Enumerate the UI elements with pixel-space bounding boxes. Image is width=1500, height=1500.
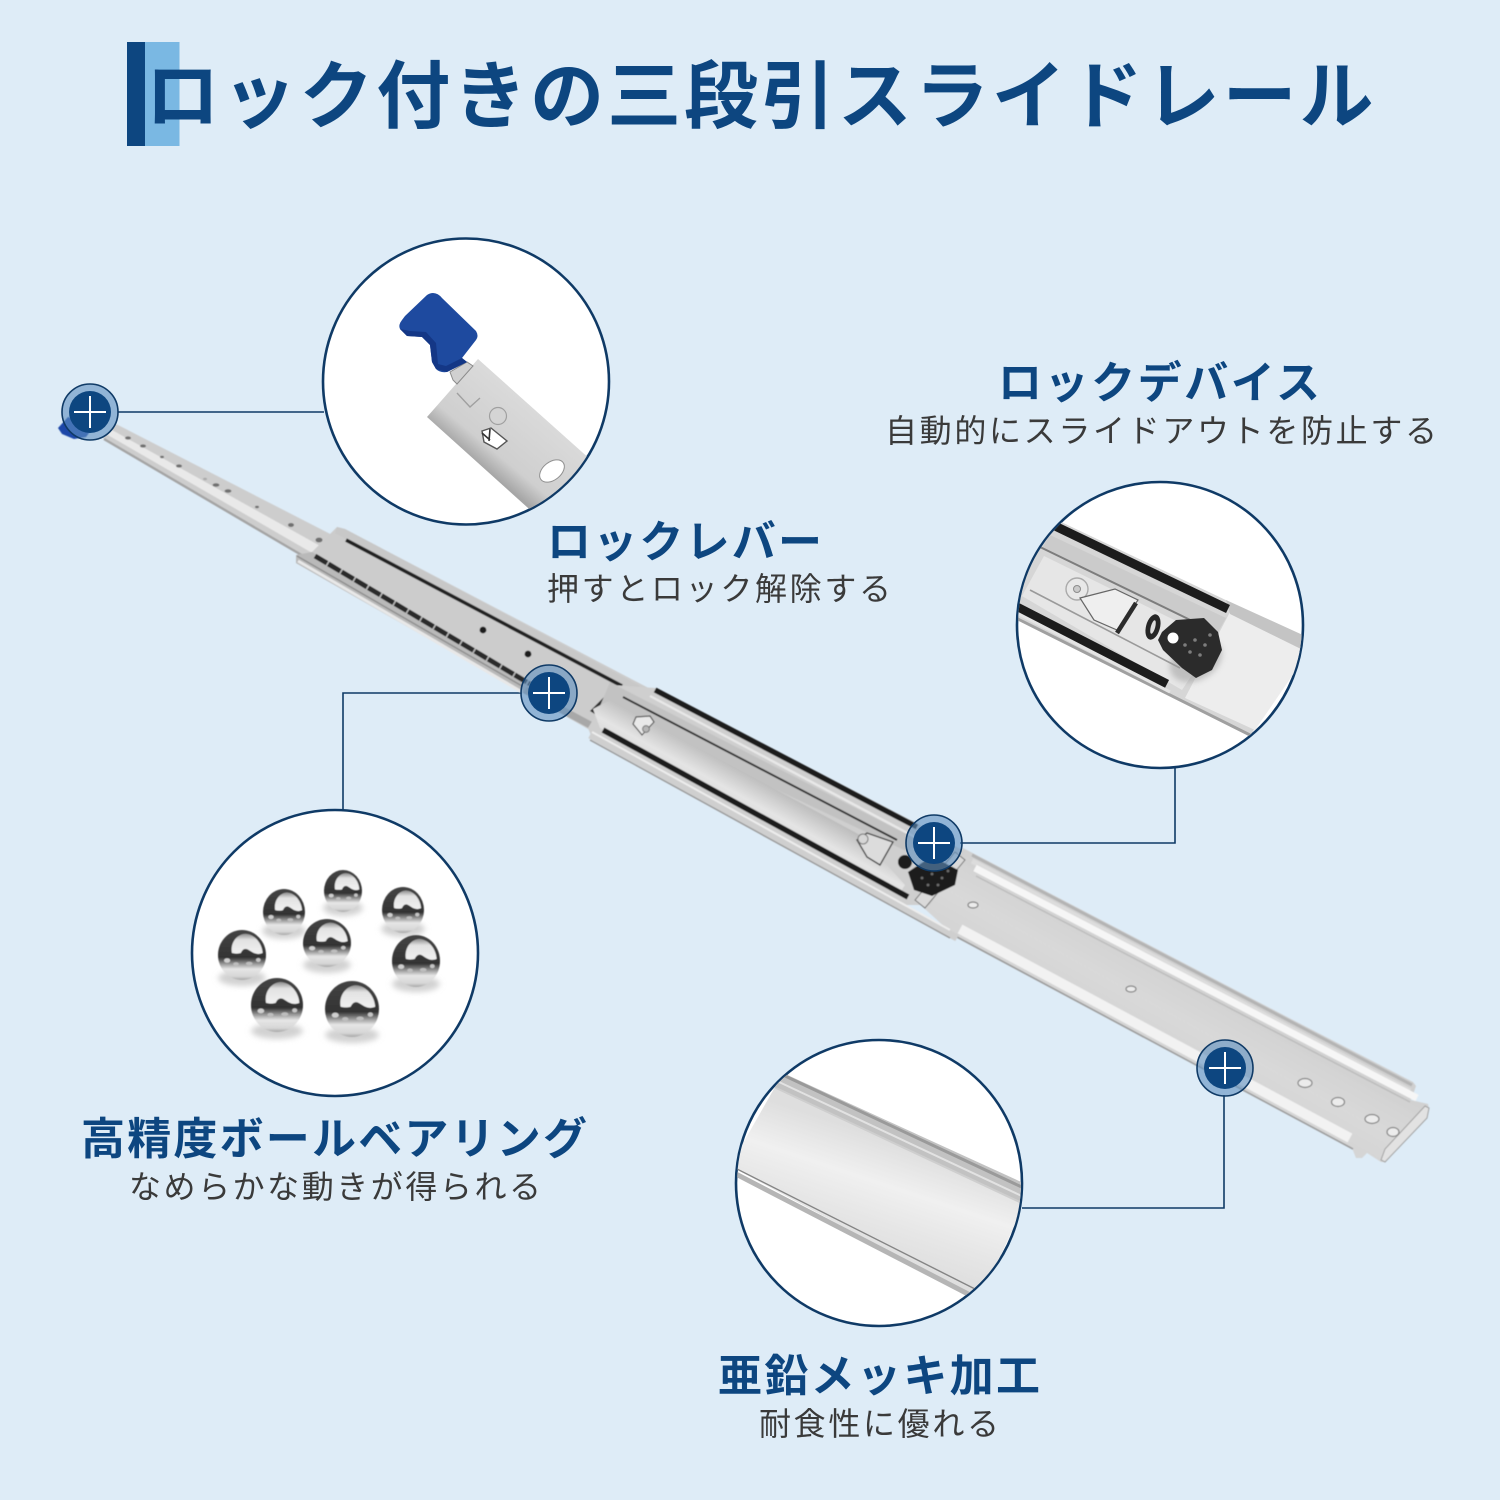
panel: zinc plating close-up — [730, 1040, 1030, 1326]
title: ロック付きの三段引スライドレール — [146, 55, 1374, 138]
description: lock lever: 押すとロック解除する — [547, 571, 891, 607]
bearing strips — [1055, 526, 1228, 609]
slide rail product — [58, 417, 1429, 1162]
lock latch — [1066, 578, 1088, 600]
black stopper — [1168, 642, 1224, 684]
section with ball bearing tracks — [588, 682, 965, 938]
connector line: ball bearing — [343, 693, 522, 811]
blue lever tip — [58, 417, 95, 439]
inner rail — [103, 424, 340, 560]
marker: lock device — [906, 815, 962, 871]
outer rail — [915, 848, 1429, 1162]
lock mechanism — [857, 833, 965, 908]
description: zinc plating: 耐食性に優れる — [759, 1406, 999, 1442]
panel: ball bearing close-up — [192, 810, 478, 1096]
connector line: lock lever — [118, 411, 324, 413]
heading: zinc plating: 亜鉛メッキ加工 — [718, 1352, 1040, 1401]
panel: lock lever close-up — [323, 238, 610, 535]
heading: ball bearing: 高精度ボールベアリング — [81, 1115, 587, 1164]
marker: zinc plating — [1197, 1040, 1253, 1096]
connector line: zinc plating — [1022, 1095, 1224, 1208]
description: ball bearing: なめらかな動きが得られる — [129, 1169, 541, 1205]
middle rail — [296, 527, 660, 733]
connector line: lock device — [960, 768, 1175, 843]
title accent bars — [127, 42, 180, 146]
steel balls — [218, 870, 440, 1043]
heading: lock lever: ロックレバー — [547, 518, 822, 567]
marker: lock lever — [62, 384, 118, 440]
opening between rails — [590, 687, 622, 716]
metal rail end — [427, 359, 587, 509]
marker: ball bearing — [521, 665, 577, 721]
description: lock device: 自動的にスライドアウトを防止する — [885, 413, 1437, 449]
blue lever handle — [399, 293, 478, 372]
heading: lock device: ロックデバイス — [998, 359, 1320, 408]
rail body — [1000, 520, 1310, 736]
panel: lock device close-up — [1000, 482, 1310, 768]
